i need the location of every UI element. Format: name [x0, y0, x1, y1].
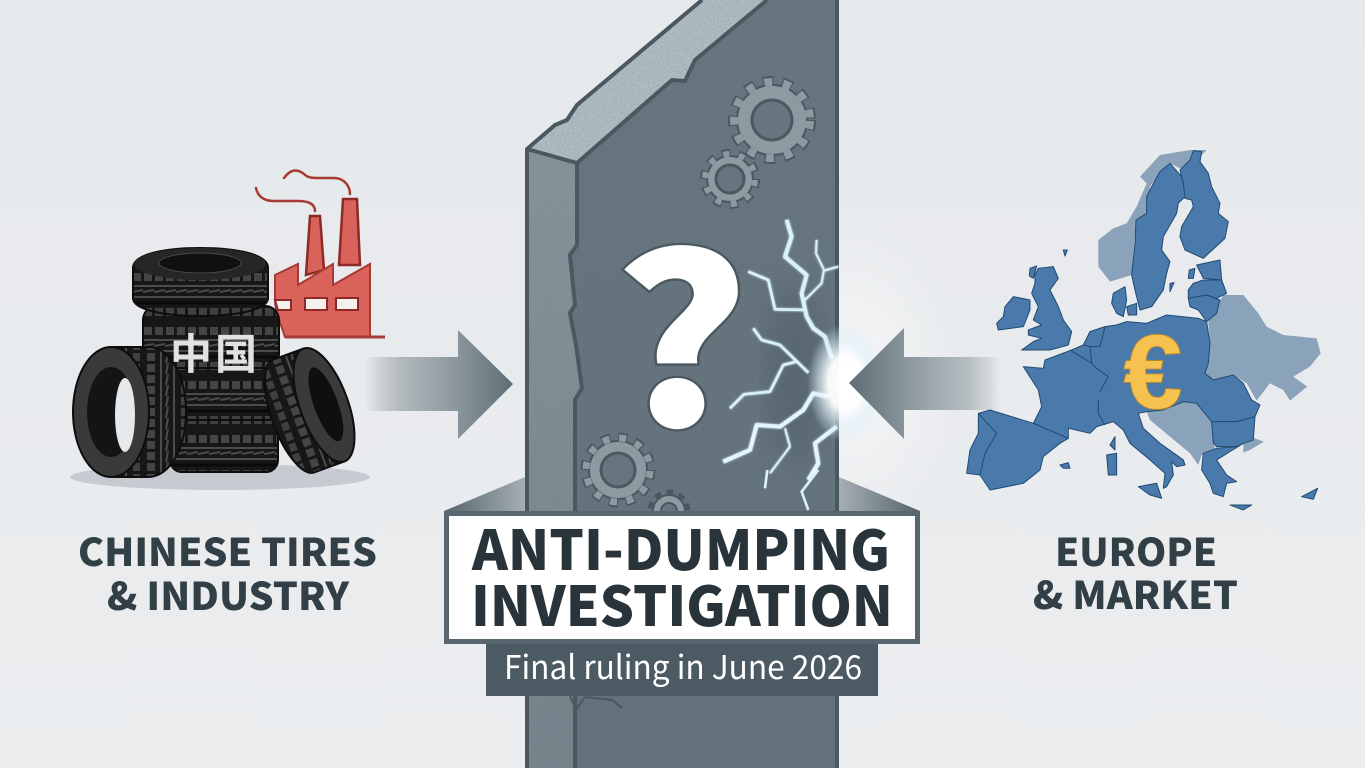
- impact glow: [807, 323, 883, 443]
- banner left flap: [444, 477, 525, 511]
- label: Chinese tires and industry: [78, 522, 377, 621]
- chimneys: [306, 199, 360, 275]
- windows: [275, 298, 358, 310]
- line 1: EUROPE: [1055, 522, 1217, 577]
- smoke: [256, 171, 350, 211]
- subtitle strip: [486, 640, 878, 696]
- icon: euro symbol: €: [1124, 314, 1182, 431]
- subtitle: Final ruling in June 2026: [504, 641, 862, 689]
- banner box: [446, 514, 918, 642]
- map of Europe: [967, 150, 1321, 510]
- left tire: [111, 347, 186, 477]
- arrow: from Chinese tires to wall: [365, 330, 513, 439]
- wall side face: [527, 150, 582, 768]
- title banner: [444, 477, 920, 710]
- wall texture: [529, 0, 764, 510]
- lower lightning cracks: [765, 470, 818, 510]
- icon: partial lower gear: [652, 494, 686, 528]
- arrow: from Europe to wall: [849, 328, 1000, 439]
- background glow beside wall: [740, 215, 960, 535]
- non-EU regions: [1093, 150, 1321, 465]
- label: Europe and market: [1033, 522, 1238, 620]
- factory baseline: [285, 336, 385, 338]
- ground shadow: [70, 464, 370, 490]
- icon: factory: [256, 171, 385, 337]
- right tire: [253, 340, 367, 480]
- crack shadow: [765, 285, 825, 465]
- EU member states: [967, 151, 1318, 510]
- wall top face: [530, 0, 767, 163]
- factory body: [275, 264, 370, 337]
- question mark: ?: [612, 158, 750, 493]
- icon: lower gear: [586, 438, 650, 502]
- banner right flap: [839, 477, 920, 511]
- line 1: CHINESE TIRES: [78, 522, 377, 577]
- stacked tires: [170, 418, 278, 472]
- internal borders: [978, 327, 1255, 475]
- China label on tire: 中国: [170, 331, 257, 378]
- icon: small gear: [705, 154, 755, 204]
- title line 1: ANTI-DUMPING: [471, 506, 890, 586]
- icon: large gear: [734, 82, 810, 158]
- lightning cracks: [723, 220, 838, 480]
- icon: tire stack: [70, 248, 370, 490]
- top tire: [133, 248, 268, 316]
- wall outlines: [527, 0, 837, 768]
- small crack below banner: [570, 696, 622, 710]
- line 2: & INDUSTRY: [107, 566, 350, 621]
- wall front face: [570, 0, 838, 768]
- central cracked wall: [527, 0, 838, 768]
- line 2: & MARKET: [1033, 565, 1238, 620]
- title line 2: INVESTIGATION: [471, 562, 893, 642]
